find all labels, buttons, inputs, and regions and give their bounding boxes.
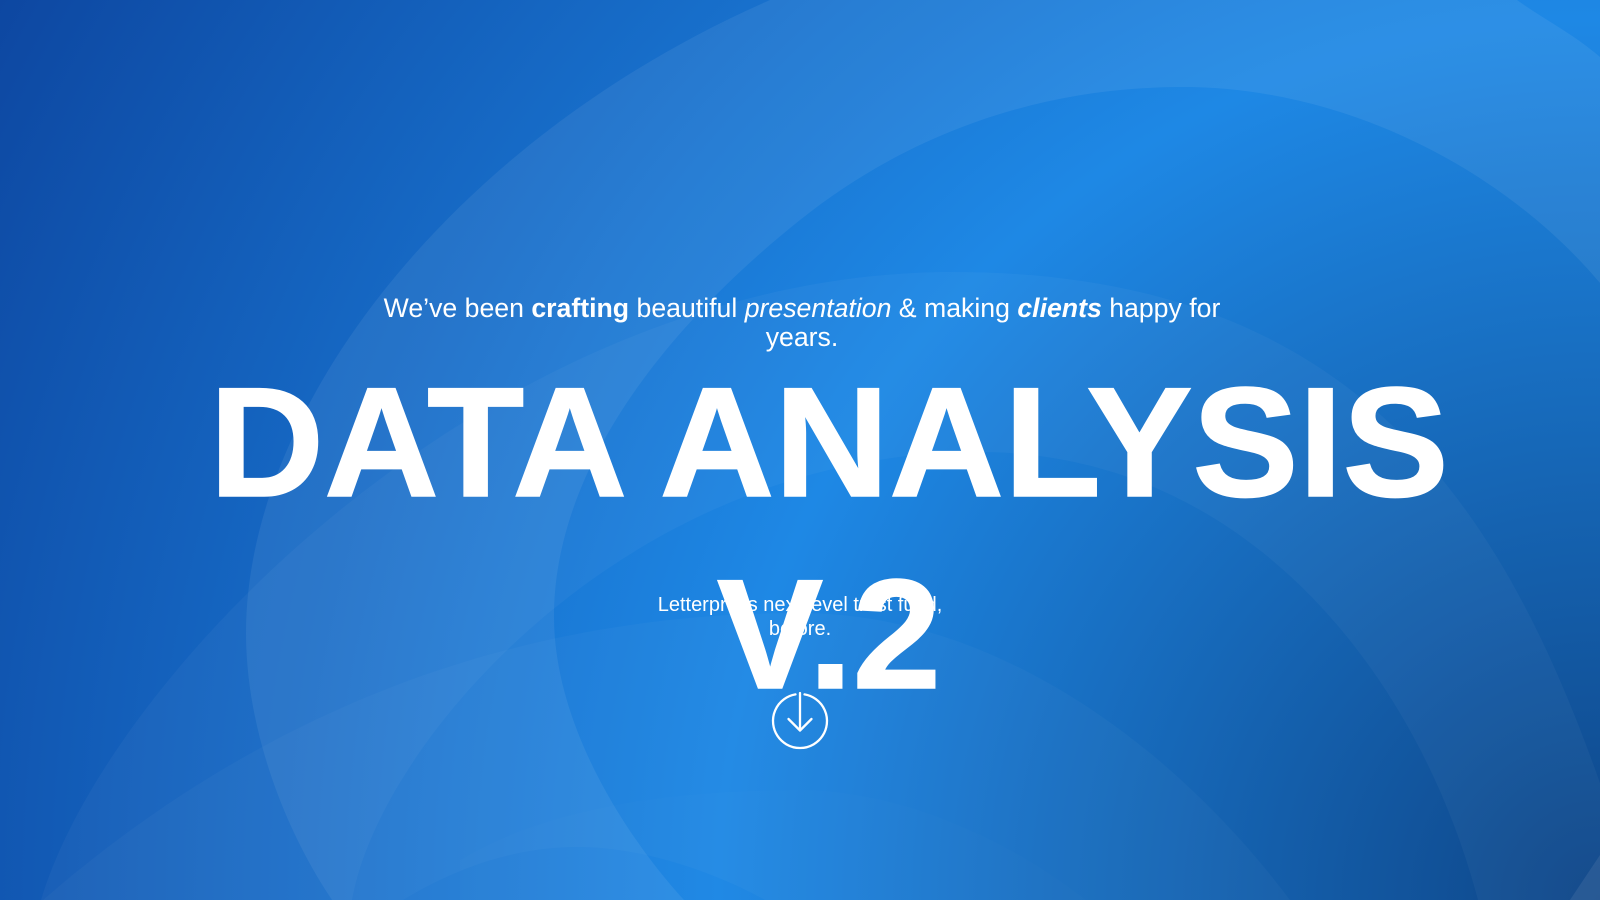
tagline text: We’ve been crafting beautiful presentation & making clients happy for	[384, 293, 1220, 323]
tagline text	[384, 293, 1220, 352]
main title: DATA ANALYSIS	[209, 356, 1449, 530]
small description text: before.	[769, 618, 831, 640]
main title: V.2	[717, 548, 941, 722]
small description text	[658, 594, 942, 640]
tagline text: years.	[766, 322, 838, 352]
small description text: Letterpress next level trust fund,	[658, 594, 942, 616]
icon: circled down arrow	[772, 692, 828, 750]
main title	[209, 356, 1449, 722]
